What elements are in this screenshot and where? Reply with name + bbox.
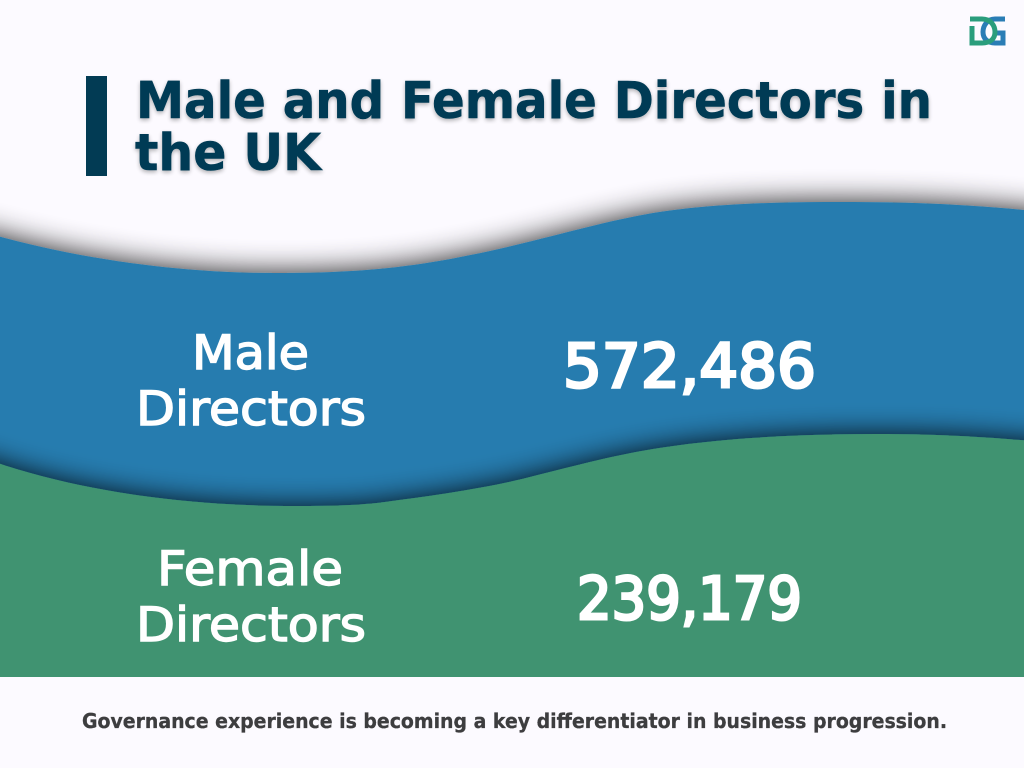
- female label: [136, 542, 366, 653]
- male label: Directors: [136, 382, 366, 437]
- female label: Female: [157, 542, 343, 597]
- icon: DG logo: [970, 19, 1005, 43]
- panel: male directors blue wave: [0, 177, 1024, 506]
- panel: female directors green wave: [0, 434, 1024, 720]
- male value: 572,486: [563, 331, 816, 402]
- female value: 239,179: [577, 564, 802, 633]
- accent bar: [86, 76, 107, 176]
- male label: Male: [192, 326, 309, 381]
- female label: Directors: [136, 598, 366, 653]
- footer note: Governance experience is becoming a key differentiator in business progression.: [82, 709, 947, 733]
- title: Male and Female Directors in: [136, 72, 932, 131]
- male label: [136, 326, 366, 437]
- title: the UK: [135, 124, 323, 183]
- title: [135, 72, 932, 183]
